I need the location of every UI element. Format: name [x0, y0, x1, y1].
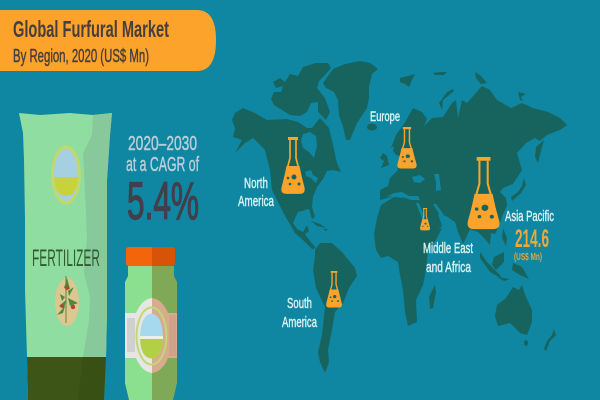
- bag emblem: [51, 146, 81, 204]
- Tasmania: [524, 340, 528, 346]
- Africa: [374, 197, 442, 326]
- label: North America: North: [244, 175, 268, 192]
- Iceland: [367, 124, 377, 130]
- Asia Pacific value: 214.6: [515, 225, 549, 253]
- Madagascar: [429, 285, 436, 309]
- New Zealand: [544, 329, 556, 351]
- label: Europe: Europe: [370, 108, 400, 124]
- Australia: [495, 285, 532, 335]
- Hudson Bay: [301, 132, 317, 158]
- Sakhalin: [535, 140, 544, 163]
- flask: Middle East and Africa: [420, 208, 430, 230]
- label: Middle East and Africa: [423, 240, 474, 276]
- label: South America: South: [287, 295, 312, 312]
- world map: [232, 61, 567, 373]
- Persian Gulf: [433, 204, 444, 215]
- Black Sea: [412, 175, 425, 183]
- Caribbean islands: [311, 221, 328, 231]
- flask: Europe: [398, 127, 416, 168]
- South America: [313, 243, 357, 373]
- Mediterranean Sea: [386, 192, 420, 200]
- CAGR callout: [126, 133, 199, 231]
- Caspian Sea: [434, 174, 441, 191]
- title: Global Furfural Market: [13, 16, 169, 42]
- fertilizer bag: FERTILIZER: [32, 245, 100, 272]
- Red Sea: [416, 203, 428, 226]
- inland seas: [301, 132, 536, 226]
- jar lid: [126, 247, 175, 266]
- label: South America: [282, 295, 317, 331]
- label: North America: America: [238, 193, 274, 210]
- United Kingdom: [380, 153, 389, 168]
- label: Asia Pacific: [505, 208, 554, 263]
- title banner: [0, 10, 216, 71]
- plant emblem: [55, 276, 79, 326]
- Canadian Arctic islands: [271, 63, 331, 120]
- Novaya Zemlya: [439, 89, 454, 110]
- label: North America: [238, 175, 274, 210]
- Svalbard and Arctic islands: [400, 72, 526, 101]
- CAGR value: 5.4%: [127, 172, 199, 231]
- subtitle: By Region, 2020 (US$ Mn): [13, 46, 149, 66]
- label: South America: America: [282, 314, 317, 331]
- Southeast Asian islands: [480, 228, 529, 281]
- Baltic Sea: [388, 146, 394, 162]
- Japan: [511, 178, 526, 201]
- flask: South America: [327, 271, 341, 307]
- fertilizer jar: [125, 247, 177, 400]
- flask: North America: [282, 137, 304, 193]
- CAGR label: at a CAGR of: [126, 154, 199, 176]
- North America: [232, 108, 341, 249]
- jar label: [125, 298, 177, 373]
- label: Asia Pacific: Asia Pacific: [505, 208, 554, 225]
- Asia Pacific unit: (US$ Mn): [514, 252, 542, 263]
- fertilizer bag: [19, 113, 112, 400]
- label: Middle East and Africa: Middle East: [423, 240, 474, 257]
- Eurasia: [380, 86, 567, 245]
- flask: Asia Pacific: [468, 157, 499, 228]
- Greenland: [323, 61, 378, 140]
- label: Middle East and Africa: and Africa: [426, 259, 471, 276]
- CAGR period: 2020–2030: [128, 133, 197, 155]
- Great Lakes: [305, 170, 318, 183]
- Sea of Okhotsk: [517, 142, 536, 165]
